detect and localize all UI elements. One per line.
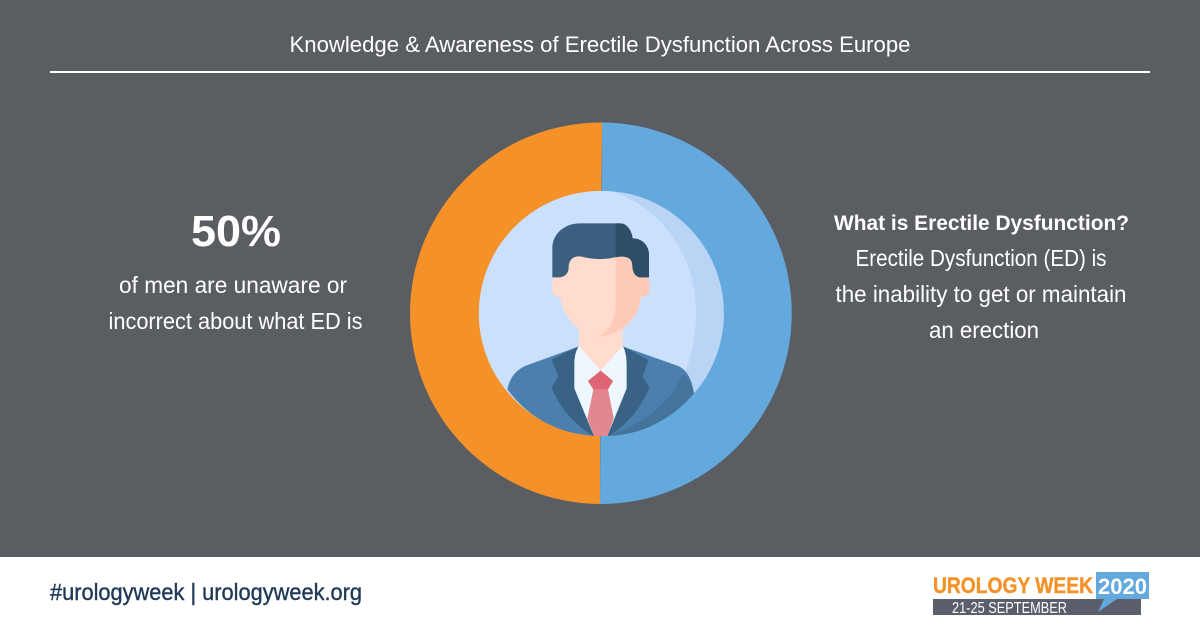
definition text block: What is Erectile Dysfunction? — [834, 211, 1129, 235]
definition text block: an erection — [929, 317, 1039, 343]
title: Knowledge & Awareness of Erectile Dysfunction Across Europe — [290, 32, 910, 57]
logo: Urology Week 2020: 2020 — [1098, 574, 1147, 599]
statistic: 50 percent — [108, 207, 362, 334]
statistic description — [108, 272, 362, 334]
statistic description: incorrect about what ED is — [108, 308, 362, 334]
icon: businessman avatar — [479, 191, 724, 436]
definition text block — [834, 211, 1129, 343]
ears — [552, 275, 569, 297]
definition text block: Erectile Dysfunction (ED) is — [856, 245, 1106, 271]
statistic: 50 percent: 50% — [191, 207, 281, 256]
face — [561, 255, 641, 337]
footer hashtag and website: #urologyweek | urologyweek.org — [50, 579, 362, 605]
logo: Urology Week 2020 — [933, 572, 1149, 617]
statistic description: of men are unaware or — [119, 272, 347, 298]
donut chart — [410, 122, 792, 504]
collar shadow lapels — [552, 347, 602, 436]
logo: Urology Week 2020: 21-25 SEPTEMBER — [952, 600, 1067, 617]
footer band — [0, 557, 1200, 630]
logo: Urology Week 2020: UROLOGY WEEK — [933, 573, 1093, 598]
neck — [579, 327, 623, 372]
tie — [587, 371, 614, 436]
shirt — [574, 346, 627, 436]
suit — [507, 347, 694, 436]
definition text block: the inability to get or maintain — [836, 281, 1126, 307]
hair — [552, 223, 649, 277]
